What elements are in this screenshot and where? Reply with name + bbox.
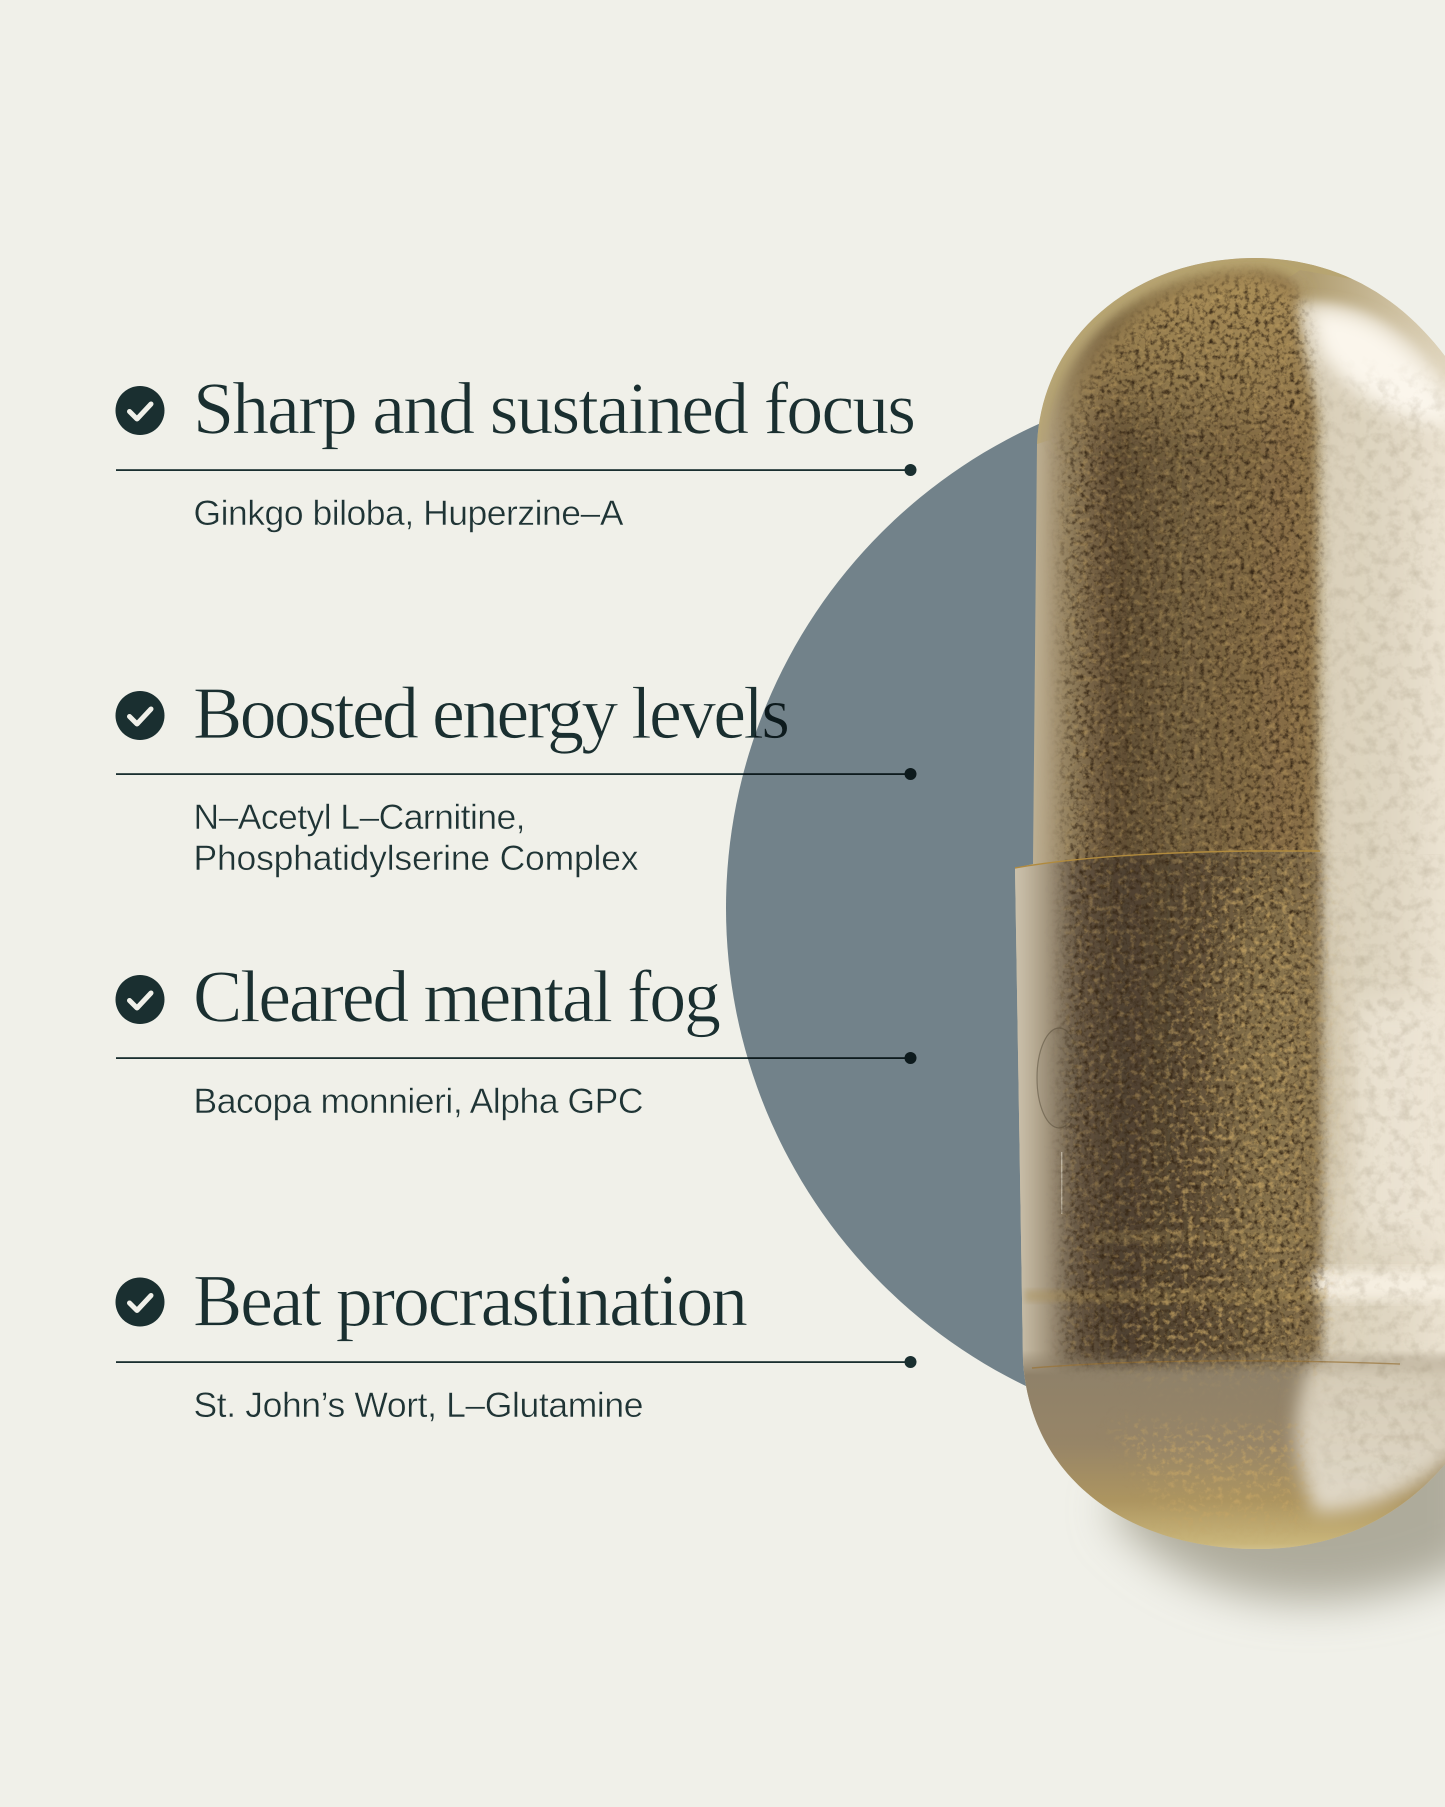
ingredients: N–Acetyl L–Carnitine, <box>194 797 526 837</box>
divider with dot <box>116 768 916 780</box>
seam line <box>1015 851 1320 868</box>
check icon <box>116 691 164 740</box>
cap line <box>1032 1361 1400 1368</box>
dome rim gold <box>1037 258 1445 444</box>
bright cap band <box>1315 1270 1445 1300</box>
powder noise <box>1054 271 1445 1516</box>
cap scratch <box>1061 1152 1062 1214</box>
capsule <box>1000 240 1445 1565</box>
ingredients <box>194 797 639 878</box>
bright top highlight <box>1310 310 1445 425</box>
powder upper dome tint <box>1076 272 1306 434</box>
check icon <box>116 386 164 435</box>
heading: Beat procrastination <box>193 1260 748 1342</box>
ingredients: St. John’s Wort, L–Glutamine <box>194 1385 644 1425</box>
heading: Cleared mental fog <box>193 956 721 1038</box>
ingredients: Bacopa monnieri, Alpha GPC <box>194 1081 644 1121</box>
pale bottom <box>1297 1362 1445 1512</box>
ingredients: Ginkgo biloba, Huperzine–A <box>194 493 624 533</box>
item: Cleared mental fog <box>116 956 916 1121</box>
divider with dot <box>116 1052 916 1064</box>
powder upper <box>1040 272 1320 880</box>
capsule shadow <box>1110 1340 1445 1601</box>
check icon <box>116 1278 164 1326</box>
golden speckled zone <box>1215 890 1325 1290</box>
check icon <box>116 975 164 1024</box>
divider with dot <box>116 464 916 476</box>
blue circle <box>726 377 1445 1439</box>
divider with dot <box>116 1356 916 1368</box>
powder cap <box>1022 840 1328 1380</box>
heading: Sharp and sustained focus <box>193 368 916 450</box>
item: Beat procrastination <box>116 1260 916 1425</box>
heading: Boosted energy levels <box>193 673 790 755</box>
pale highlight upper <box>1298 302 1445 880</box>
bottom tint <box>1015 1350 1445 1560</box>
item: Boosted energy levels <box>116 673 916 878</box>
cap dimple <box>1037 1028 1081 1128</box>
pale cap <box>1324 840 1445 1420</box>
item: Sharp and sustained focus <box>116 368 916 533</box>
capsule body <box>1010 250 1445 1560</box>
ingredients: Phosphatidylserine Complex <box>194 838 639 878</box>
capsule cap <box>1010 840 1445 1565</box>
